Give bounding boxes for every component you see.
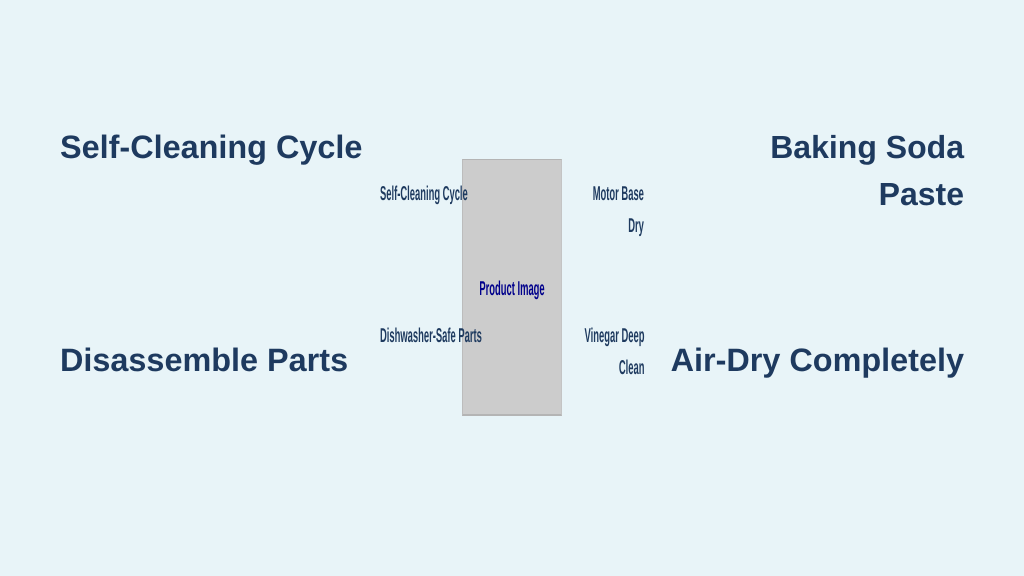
heading: Self-Cleaning Cycle: Self-Cleaning Cycle (60, 129, 362, 165)
label: Motor Base Dry: Motor Base (593, 183, 644, 205)
label: Motor Base Dry: Dry (628, 215, 644, 237)
product image placeholder (462, 159, 562, 416)
heading: Baking Soda Paste: Baking Soda (770, 129, 964, 165)
label: Vinegar Deep Clean: Vinegar Deep (584, 325, 644, 347)
heading: Air-Dry Completely: Air-Dry Completely (671, 342, 964, 378)
label: Motor Base Dry (593, 183, 644, 237)
label: Vinegar Deep Clean (584, 325, 644, 379)
label: Self-Cleaning Cycle: Self-Cleaning Cycle (380, 183, 468, 205)
heading: Baking Soda Paste: Paste (879, 176, 964, 212)
product image label: Product Image (479, 278, 545, 300)
heading: Baking Soda Paste (770, 129, 964, 212)
label: Dishwasher-Safe Parts: Dishwasher-Safe Parts (380, 325, 482, 347)
label: Vinegar Deep Clean: Clean (618, 357, 644, 379)
heading: Disassemble Parts: Disassemble Parts (60, 342, 348, 378)
